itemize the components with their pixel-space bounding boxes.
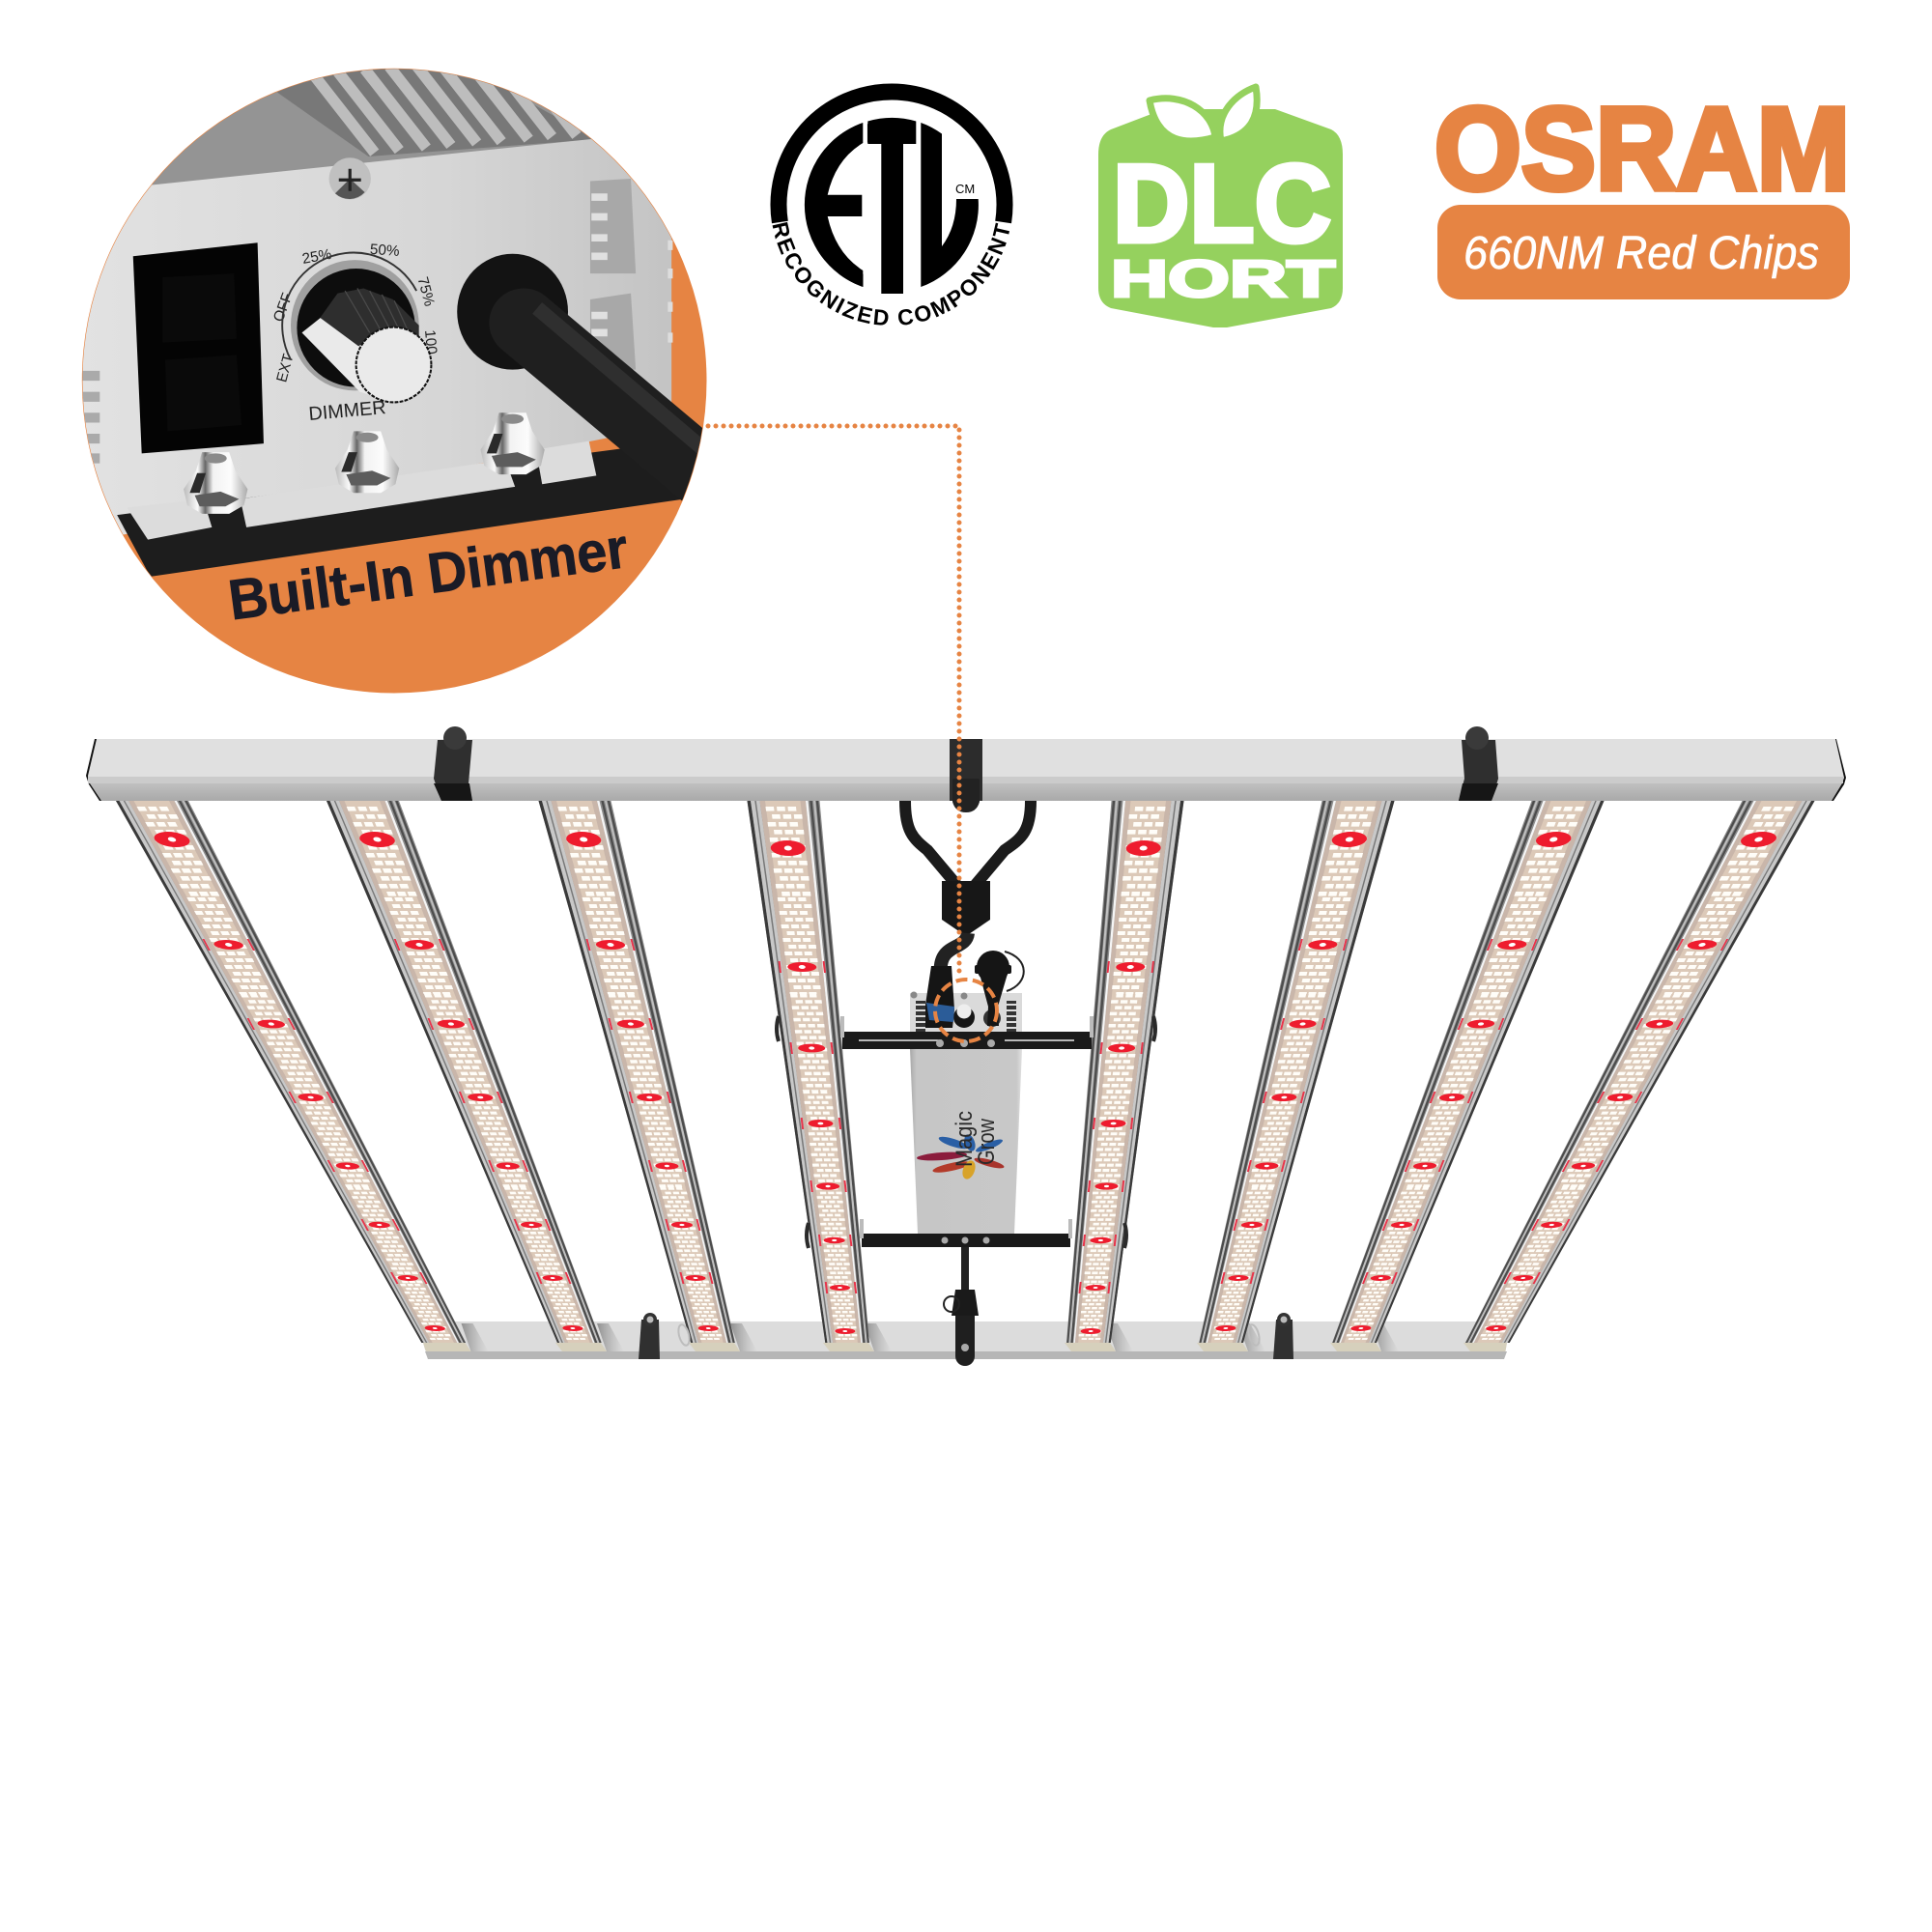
dimmer scale arc <box>282 253 416 359</box>
lower bracket <box>862 1219 1070 1247</box>
LED bar 3 <box>539 801 750 1343</box>
right vents <box>590 179 670 370</box>
Y hanger cable <box>905 801 1031 887</box>
driver top surface <box>146 69 601 192</box>
LED bar 7 <box>1318 801 1604 1343</box>
right power plug <box>975 951 1024 1026</box>
RJ port block <box>133 242 264 453</box>
dimmer labels: 50% <box>369 242 400 260</box>
ETL monogram <box>804 118 979 294</box>
upper bracket <box>842 1016 1092 1049</box>
LED bar 1 <box>116 801 480 1343</box>
660NM pill <box>1437 205 1850 299</box>
dimmer labels: 25% <box>301 246 333 268</box>
certification: DLC Hort logo <box>1098 87 1343 327</box>
ETL monogram: E <box>810 72 867 346</box>
power cable <box>524 308 708 478</box>
driver front face <box>74 135 690 542</box>
panel: built-in dimmer badge <box>74 57 708 693</box>
callout: dotted leader line <box>708 426 959 978</box>
ETL monogram: T <box>866 71 917 346</box>
dimmer labels: OFF <box>270 291 296 325</box>
ETL monogram: L <box>918 71 958 345</box>
outer hooks <box>777 1016 1155 1248</box>
left vents <box>81 376 99 458</box>
certification: ETL logo <box>770 83 1012 325</box>
clip: bottom bar right <box>1273 1313 1293 1359</box>
dimmer labels: DIMMER <box>308 397 386 425</box>
lower stem and connector <box>944 1247 979 1366</box>
left power plug <box>925 966 954 1028</box>
driver logo: Grow <box>974 1118 1000 1165</box>
black mounting bar <box>117 446 684 577</box>
cable grommet <box>457 254 568 370</box>
badge heading: Built-In Dimmer <box>225 517 632 632</box>
clip: top bar right <box>1459 726 1498 801</box>
LED bar 4 <box>748 801 884 1343</box>
dimmer labels <box>270 242 440 425</box>
driver logo <box>917 1111 1005 1180</box>
dimmer labels: 100 <box>421 329 440 355</box>
LED bar 2 <box>327 801 615 1343</box>
junction box <box>942 881 990 934</box>
heat sink fins <box>277 69 591 156</box>
cable to driver <box>941 933 968 976</box>
LED bar 6 <box>1185 801 1395 1343</box>
certification: ETL logo: RECOGNIZED COMPONENT <box>773 222 1009 325</box>
callout: dashed target circle <box>935 980 997 1041</box>
LED bar 5 <box>1052 801 1184 1343</box>
dimmer labels: 75% <box>414 275 438 308</box>
DLC leaves <box>1150 87 1257 141</box>
ETL curved caption <box>773 224 1010 326</box>
mounting plates <box>127 441 596 540</box>
OSRAM wordmark: OSRAM <box>1435 83 1850 214</box>
driver body <box>910 1049 1022 1234</box>
660NM pill: 660NM Red Chips <box>1463 228 1819 279</box>
clip: top bar centre <box>950 739 982 812</box>
bottom crossbar <box>419 1321 1532 1359</box>
carabiners <box>676 1323 1262 1347</box>
mounting nuts <box>184 412 545 514</box>
dimmer knob <box>291 260 431 402</box>
top screw <box>329 157 371 200</box>
ETL CM mark: CM <box>955 182 975 196</box>
clip: bottom bar left <box>639 1313 660 1359</box>
driver head <box>910 991 1022 1034</box>
DLC shield <box>1098 109 1343 327</box>
top crossbar <box>86 739 1846 801</box>
HORT wordmark: HORT <box>1111 250 1335 308</box>
driver logo: Magic <box>952 1111 978 1167</box>
LED bar 8 <box>1451 801 1814 1343</box>
ETL outer ring <box>779 92 1005 222</box>
dimmer labels: EXT <box>273 353 297 384</box>
clip: top bar left <box>434 726 472 801</box>
DLC wordmark: DLC <box>1113 143 1331 266</box>
